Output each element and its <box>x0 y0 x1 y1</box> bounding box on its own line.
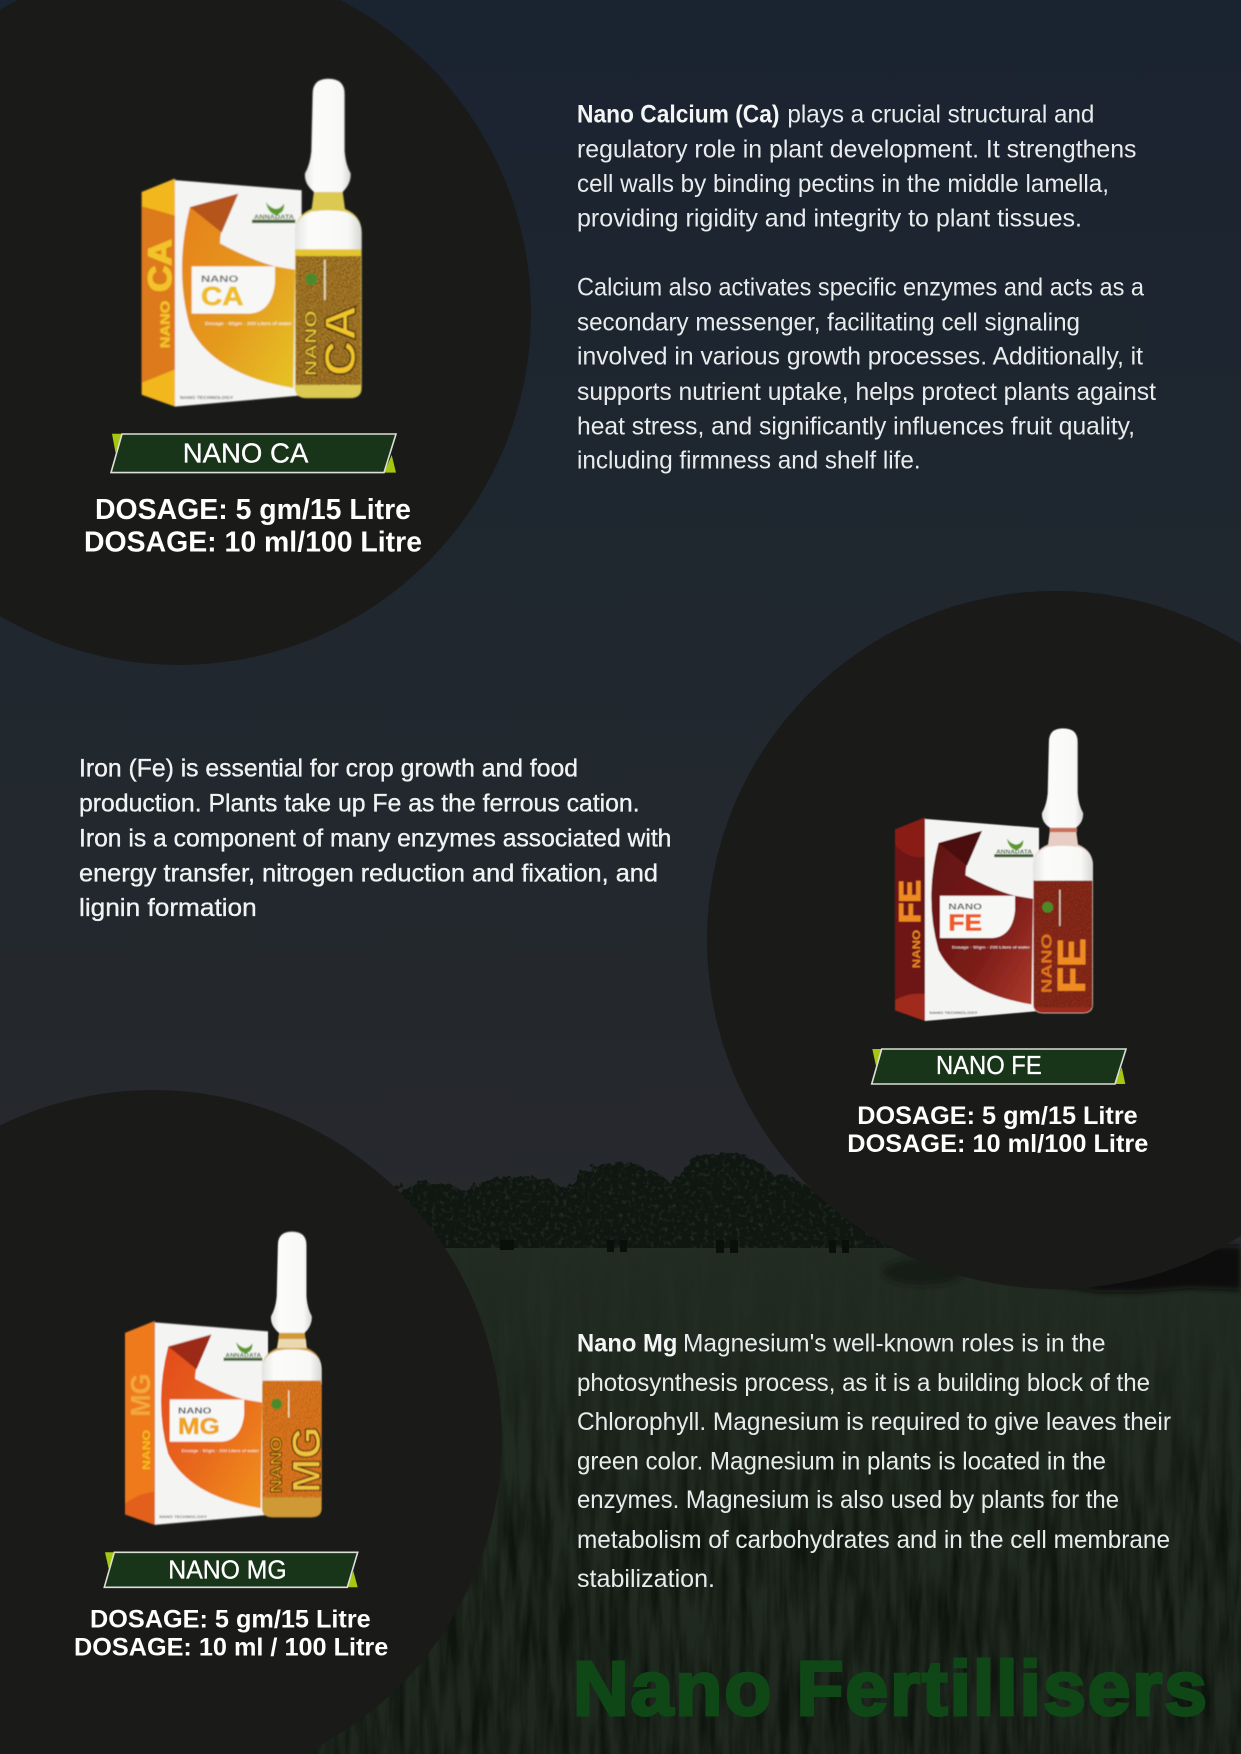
text block: nano calcium description: Nano Calcium (Ca) <box>577 101 780 129</box>
icon: nano FE product box and ampoule: FE <box>948 909 982 935</box>
icon: nano CA product box and ampoule: NANO <box>201 273 238 284</box>
icon: nano MG product box and ampoule: MG <box>125 1373 156 1417</box>
icon: nano FE product box and ampoule: NANO <box>948 902 983 912</box>
dosage: NANO CA <box>84 494 422 558</box>
badge: NANO MG <box>104 1552 358 1587</box>
text block: nano magnesium description: Chlorophyll. Magnesium is required to give leaves their <box>577 1408 1171 1436</box>
badge: NANO FE: NANO FE <box>936 1050 1042 1080</box>
icon: nano MG product box and ampoule: Dosage · 50gm · 200 Liters of water <box>182 1448 260 1453</box>
text block: iron description: Iron is a component of many enzymes associated with <box>79 825 671 853</box>
dosage: NANO FE: DOSAGE: 5 gm/15 Litre <box>857 1102 1138 1130</box>
icon: nano CA product box and ampoule <box>141 79 365 407</box>
text block: iron description: lignin formation <box>79 894 257 922</box>
dosage: NANO FE <box>847 1102 1148 1158</box>
text block: nano calcium description: providing rigidity and integrity to plant tissues. <box>577 205 1082 233</box>
panel: nano Ca circle <box>0 0 531 665</box>
icon: nano CA product box and ampoule: ANNADATA <box>254 215 295 221</box>
text block: iron description: energy transfer, nitrogen reduction and fixation, and <box>79 859 658 887</box>
text block: nano magnesium description: enzymes. Magnesium is also used by plants for the <box>577 1486 1119 1514</box>
text block: nano calcium description: regulatory role in plant development. It strengthens <box>577 135 1136 163</box>
icon: nano CA product box and ampoule: CA <box>141 239 178 292</box>
panel: nano Mg circle <box>0 1090 502 1754</box>
dosage: NANO MG <box>74 1605 388 1662</box>
badge: NANO CA: NANO CA <box>183 437 309 468</box>
dosage: NANO CA: DOSAGE: 10 ml/100 Litre <box>84 526 422 558</box>
icon: nano MG product box and ampoule: NANO <box>178 1405 212 1415</box>
icon: nano FE product box and ampoule: FE <box>894 880 927 923</box>
background: tree trunks and far hedge <box>500 1240 1241 1292</box>
text block: nano calcium description: involved in various growth processes. Additionally, it <box>577 343 1143 371</box>
text block: iron description: production. Plants take up Fe as the ferrous cation. <box>79 789 640 817</box>
background: tree line <box>370 1152 1040 1270</box>
icon: nano FE product box and ampoule: NANO <box>1039 933 1056 993</box>
text block: nano magnesium description: metabolism of carbohydrates and in the cell membrane <box>577 1526 1170 1554</box>
box side face <box>125 1321 155 1525</box>
text block: nano calcium description: Calcium also activates specific enzymes and acts as a <box>577 273 1144 301</box>
icon: nano MG product box and ampoule: NANO TECHNOLOGY <box>159 1514 207 1519</box>
icon: nano FE product box and ampoule: FE <box>1051 938 1094 993</box>
dosage: NANO MG: DOSAGE: 5 gm/15 Litre <box>90 1605 371 1633</box>
icon: nano CA product box and ampoule: NANO TECHNOLOGY <box>180 395 233 400</box>
icon: nano MG product box and ampoule: MG <box>283 1427 329 1493</box>
box side face <box>142 178 175 407</box>
icon: nano MG product box and ampoule <box>125 1232 329 1525</box>
title: Nano Fertillisers: Nano Fertillisers <box>573 1646 1207 1732</box>
dosage: NANO MG: DOSAGE: 10 ml / 100 Litre <box>74 1634 388 1662</box>
icon: nano CA product box and ampoule: CA <box>316 305 365 376</box>
badge: NANO FE <box>872 1049 1126 1084</box>
icon: nano FE product box and ampoule: ANNADATA <box>996 850 1032 856</box>
icon: nano MG product box and ampoule: ANNADATA <box>225 1353 261 1359</box>
text block: iron description: Iron (Fe) is essential for crop growth and food <box>79 755 578 783</box>
icon: nano CA product box and ampoule: NANO <box>157 301 172 348</box>
text block: iron description <box>79 755 671 922</box>
text block: nano calcium description: heat stress, and significantly influences fruit quality, <box>577 413 1135 441</box>
icon: nano CA product box and ampoule: CA <box>201 283 244 311</box>
background: night sky <box>0 0 1241 1260</box>
text block: nano calcium description: supports nutrient uptake, helps protect plants against <box>577 378 1156 406</box>
box side face <box>895 817 925 1021</box>
dosage: NANO CA: DOSAGE: 5 gm/15 Litre <box>95 494 411 526</box>
icon: nano CA product box and ampoule: NANO <box>303 310 321 376</box>
icon: nano MG product box and ampoule: MG <box>178 1413 220 1439</box>
icon: nano FE product box and ampoule: NANO TECHNOLOGY <box>930 1010 978 1015</box>
text block: nano calcium description: plays a crucial structural and <box>787 101 1094 129</box>
icon: nano MG product box and ampoule: NANO <box>141 1430 153 1470</box>
text block: nano magnesium description: photosynthesis process, as it is a building block of the <box>577 1369 1150 1397</box>
text block: nano calcium description: including firmness and shelf life. <box>577 447 921 475</box>
dosage: NANO FE: DOSAGE: 10 ml/100 Litre <box>847 1130 1148 1158</box>
icon: nano FE product box and ampoule: Dosage · 50gm · 200 Liters of water <box>952 944 1031 949</box>
text block: nano calcium description <box>577 101 1156 475</box>
badge: NANO MG: NANO MG <box>168 1554 287 1584</box>
text block: nano magnesium description: Nano Mg <box>577 1330 677 1358</box>
text block: nano calcium description: secondary messenger, facilitating cell signaling <box>577 309 1080 337</box>
box front face <box>155 1322 268 1525</box>
text block: nano calcium description: cell walls by binding pectins in the middle lamella, <box>577 170 1109 198</box>
text block: nano magnesium description: stabilization. <box>577 1565 715 1593</box>
icon: nano MG product box and ampoule: NANO <box>269 1437 286 1493</box>
ampoule <box>295 191 362 398</box>
ampoule <box>262 1332 322 1517</box>
ampoule <box>1033 829 1093 1013</box>
icon: nano CA product box and ampoule: Dosage · 50gm · 200 Liters of water <box>205 321 292 326</box>
panel: nano Fe circle <box>707 591 1241 1289</box>
badge: NANO CA <box>111 434 396 473</box>
icon: nano FE product box and ampoule: NANO <box>911 930 923 968</box>
text block: nano magnesium description: green color. Magnesium in plants is located in the <box>577 1447 1106 1475</box>
box front face <box>925 819 1039 1021</box>
icon: nano FE product box and ampoule <box>894 728 1094 1021</box>
text block: nano magnesium description: Magnesium's well-known roles is in the <box>683 1330 1106 1358</box>
text block: nano magnesium description <box>577 1330 1171 1593</box>
box front face <box>175 180 302 407</box>
background: grass field <box>0 1248 1241 1754</box>
